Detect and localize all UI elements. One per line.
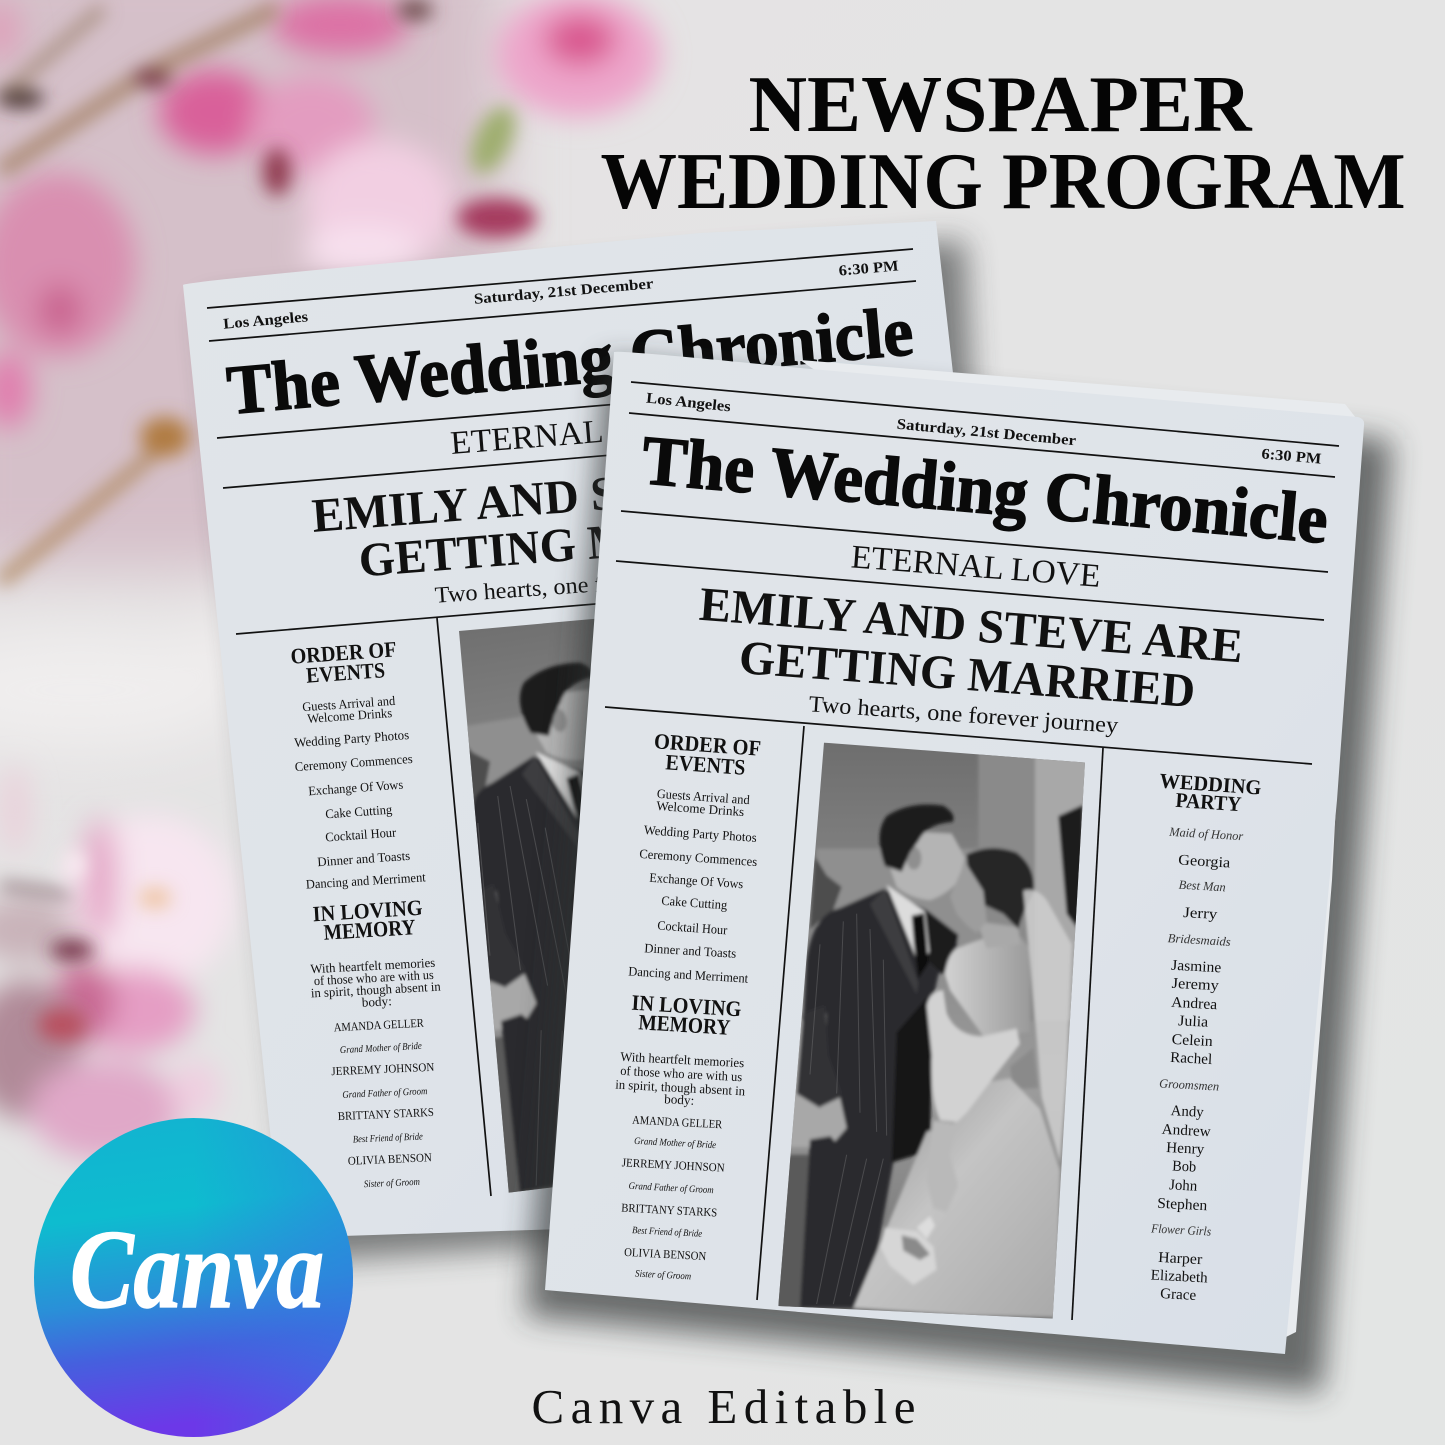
back in loving memory: body:	[361, 993, 392, 1010]
front wedding party: Jeremy	[1171, 976, 1220, 994]
front order of events: Exchange Of Vows	[649, 870, 744, 891]
page stack behind sheet	[800, 360, 1356, 1340]
icon: Canva logo badge: Canva	[70, 1208, 324, 1332]
back in loving memory: With heartfelt memories	[310, 955, 436, 976]
front in loving memory: BRITTANY STARKS	[621, 1201, 718, 1220]
front wedding party: Groomsmen	[1159, 1076, 1220, 1094]
back in loving memory: AMANDA GELLER	[333, 1016, 424, 1034]
front masthead rules	[605, 382, 1339, 1320]
front wedding party: John	[1169, 1177, 1198, 1195]
front in loving memory: Grand Father of Groom	[628, 1181, 714, 1196]
front wedding party: Bob	[1172, 1158, 1197, 1176]
back headline: GETTING MARRIED	[357, 500, 817, 587]
shadow: front newspaper	[526, 360, 1392, 1392]
front order of events: ORDER OF	[653, 728, 762, 761]
back order of events: Cake Cutting	[325, 802, 393, 821]
back in loving memory	[310, 895, 442, 1190]
front order of events: Cocktail Hour	[657, 918, 728, 937]
front masthead title: The Wedding Chronicle	[639, 422, 1331, 559]
back date strip	[223, 258, 899, 333]
front in loving memory: body:	[664, 1091, 695, 1108]
back date strip: 6:30 PM	[838, 258, 899, 280]
front wedding party: Rachel	[1170, 1050, 1213, 1068]
front wedding party: Andy	[1170, 1103, 1205, 1121]
front wedding party: Best Man	[1178, 878, 1226, 894]
back order of events: EVENTS	[305, 657, 386, 688]
back in loving memory: BRITTANY STARKS	[338, 1105, 434, 1123]
back order of events: Welcome Drinks	[307, 705, 393, 726]
back in loving memory: of those who are with us	[313, 967, 434, 988]
back headline	[310, 448, 858, 587]
back order of events	[290, 636, 426, 892]
back date strip: Saturday, 21st December	[473, 276, 654, 308]
back in loving memory: IN LOVING	[312, 895, 423, 926]
back in loving memory: JERREMY JOHNSON	[331, 1060, 435, 1078]
front order of events: Welcome Drinks	[656, 798, 745, 819]
front date strip: 6:30 PM	[1261, 446, 1322, 468]
front headline: GETTING MARRIED	[737, 631, 1197, 718]
back photo	[459, 618, 594, 1193]
front wedding party: Jasmine	[1171, 958, 1222, 976]
front order of events: Cake Cutting	[661, 893, 728, 912]
front photo	[770, 730, 1100, 1330]
back newspaper sheet	[183, 221, 1000, 1238]
front wedding party: PARTY	[1175, 788, 1242, 816]
back order of events: ORDER OF	[290, 636, 397, 669]
front wedding party: Grace	[1160, 1286, 1197, 1304]
front in loving memory: MEMORY	[638, 1009, 731, 1040]
back date strip: Los Angeles	[223, 309, 309, 333]
back order of events: Dancing and Merriment	[305, 869, 426, 892]
back tagline: Two hearts, one forever journey	[434, 561, 745, 608]
front in loving memory: Grand Mother of Bride	[634, 1136, 717, 1151]
front newspaper	[545, 352, 1364, 1354]
back order of events: Guests Arrival and	[302, 693, 396, 714]
front headline: EMILY AND STEVE ARE	[697, 578, 1245, 673]
front order of events: Dinner and Toasts	[644, 940, 737, 961]
back order of events: Ceremony Commences	[294, 751, 413, 774]
front in loving memory: of those who are with us	[620, 1063, 743, 1084]
front in loving memory: OLIVIA BENSON	[624, 1245, 707, 1263]
back masthead title: The Wedding Chronicle	[224, 293, 916, 430]
title	[600, 61, 1406, 226]
front wedding party: Julia	[1178, 1013, 1209, 1031]
front subheading: ETERNAL LOVE	[850, 539, 1102, 595]
title: WEDDING PROGRAM	[600, 138, 1406, 226]
caption: Canva Editable	[532, 1379, 916, 1434]
back order of events: Cocktail Hour	[325, 825, 397, 844]
front order of events: Dancing and Merriment	[628, 963, 749, 986]
front wedding party: Harper	[1158, 1250, 1203, 1268]
front date strip: Saturday, 21st December	[896, 417, 1077, 449]
front order of events: EVENTS	[665, 749, 746, 780]
front in loving memory	[615, 990, 746, 1282]
front date strip: Los Angeles	[645, 391, 732, 415]
back subheading: ETERNAL LOVE	[449, 406, 701, 462]
back headline: EMILY AND STEVE ARE	[310, 448, 858, 543]
front date strip	[645, 391, 1322, 468]
front wedding party: Henry	[1166, 1140, 1205, 1158]
back in loving memory: Best Friend of Bride	[353, 1131, 424, 1146]
front in loving memory: IN LOVING	[631, 990, 742, 1021]
back newspaper	[183, 221, 1000, 1238]
front wedding party: Maid of Honor	[1168, 825, 1244, 843]
back masthead rules	[207, 249, 942, 1196]
icon: Canva logo badge	[34, 1118, 353, 1437]
back in loving memory: MEMORY	[323, 914, 416, 945]
back in loving memory: OLIVIA BENSON	[348, 1150, 432, 1168]
front wedding party: Andrew	[1161, 1122, 1211, 1140]
back order of events: Dinner and Toasts	[317, 848, 411, 869]
front in loving memory: With heartfelt memories	[620, 1049, 745, 1070]
front in loving memory: in spirit, though absent in	[615, 1077, 746, 1098]
front wedding party: Andrea	[1171, 995, 1218, 1013]
front order of events: Wedding Party Photos	[643, 822, 757, 845]
back order of events: Exchange Of Vows	[308, 777, 404, 798]
front order of events: Guests Arrival and	[656, 786, 751, 807]
front wedding party: Flower Girls	[1150, 1221, 1212, 1239]
front wedding party: Georgia	[1178, 852, 1231, 872]
back in loving memory: in spirit, though absent in	[310, 979, 442, 1000]
front in loving memory: Best Friend of Bride	[632, 1225, 703, 1240]
title: NEWSPAPER	[748, 61, 1253, 149]
back in loving memory: Grand Father of Groom	[342, 1086, 428, 1101]
front wedding party: Elizabeth	[1150, 1268, 1209, 1287]
front wedding party: Stephen	[1157, 1196, 1208, 1214]
front wedding party: Bridesmaids	[1167, 931, 1231, 949]
front order of events: Ceremony Commences	[639, 846, 758, 869]
front headline	[697, 578, 1245, 718]
front order of events	[628, 728, 762, 986]
front wedding party: Jerry	[1183, 905, 1218, 923]
back in loving memory: Grand Mother of Bride	[340, 1041, 423, 1056]
shadow: back newspaper	[205, 240, 1010, 1262]
front wedding party	[1150, 768, 1262, 1304]
back in loving memory: Sister of Groom	[364, 1177, 420, 1190]
front wedding party: WEDDING	[1159, 768, 1262, 800]
front newspaper sheet	[545, 352, 1364, 1354]
front wedding party: Celein	[1171, 1032, 1214, 1050]
front tagline: Two hearts, one forever journey	[808, 691, 1120, 738]
back order of events: Wedding Party Photos	[294, 727, 410, 750]
front in loving memory: JERREMY JOHNSON	[621, 1155, 725, 1175]
front in loving memory: Sister of Groom	[635, 1269, 691, 1282]
front in loving memory: AMANDA GELLER	[632, 1113, 723, 1131]
